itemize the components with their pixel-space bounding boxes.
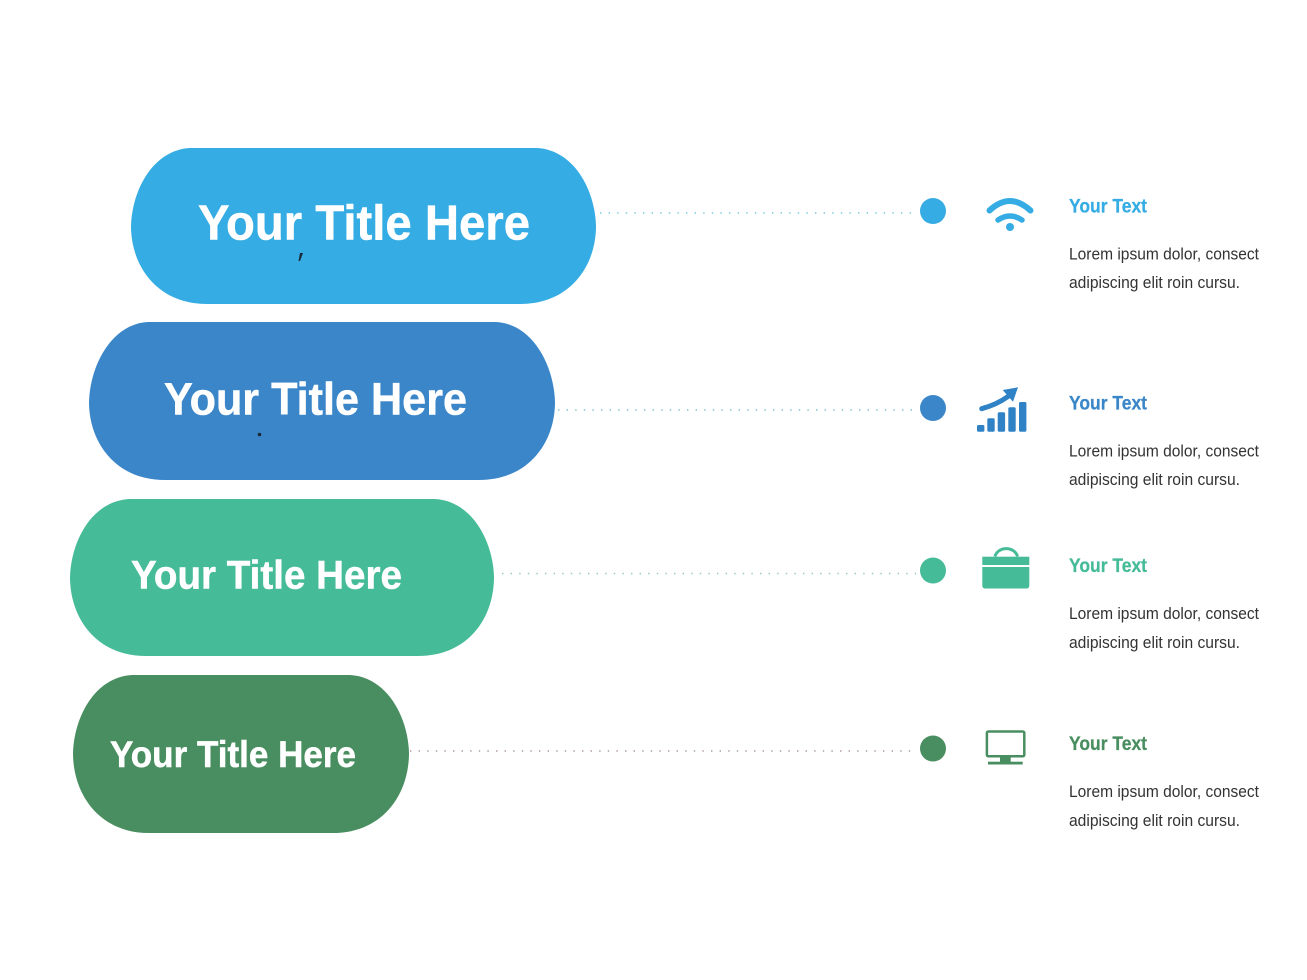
text block: item 2: Your Text	[1069, 394, 1148, 414]
text block: item 1: Lorem ipsum dolor, consect	[1069, 246, 1259, 264]
marker: green dot	[920, 736, 946, 762]
panel: teal title pill: Your Title Here	[131, 554, 402, 598]
text block: item 2	[1069, 394, 1259, 489]
connector: blue dotted line	[600, 212, 916, 214]
text block: item 1	[1069, 196, 1259, 292]
panel: green title pill	[73, 675, 409, 833]
text block: item 2: adipiscing elit roin cursu.	[1069, 471, 1240, 489]
panel: mid-blue title pill	[89, 322, 555, 480]
connector: teal dotted line	[502, 572, 916, 574]
text block: item 3: Your Text	[1069, 556, 1148, 577]
text block: item 1: Your Text	[1069, 196, 1148, 218]
text block: item 3: Lorem ipsum dolor, consect	[1069, 605, 1259, 623]
panel: blue title pill	[131, 148, 596, 304]
icon: briefcase	[982, 549, 1029, 588]
text block: item 1: adipiscing elit roin cursu.	[1069, 274, 1240, 292]
connector: green dotted line	[410, 750, 916, 752]
text block: item 4: Lorem ipsum dolor, consect	[1069, 783, 1259, 801]
text block: item 3: adipiscing elit roin cursu.	[1069, 634, 1240, 652]
icon: wifi	[990, 201, 1030, 231]
connector: mid-blue dotted line	[558, 409, 916, 411]
panel: teal title pill	[70, 499, 494, 656]
text block: item 4: adipiscing elit roin cursu.	[1069, 812, 1240, 830]
text block: item 4: Your Text	[1069, 734, 1148, 755]
icon: monitor	[987, 732, 1024, 764]
icon: growth chart with arrow	[977, 387, 1026, 432]
marker: mid-blue dot	[920, 395, 946, 421]
marker: teal dot	[920, 558, 946, 584]
panel: green title pill: Your Title Here	[110, 734, 356, 775]
text block: item 4	[1069, 734, 1259, 830]
panel: mid-blue title pill: Your Title Here	[164, 374, 467, 424]
text block: item 2: Lorem ipsum dolor, consect	[1069, 442, 1259, 460]
marker: blue dot	[920, 198, 946, 224]
text block: item 3	[1069, 556, 1259, 652]
panel: blue title pill: Your Title Here	[198, 196, 530, 250]
